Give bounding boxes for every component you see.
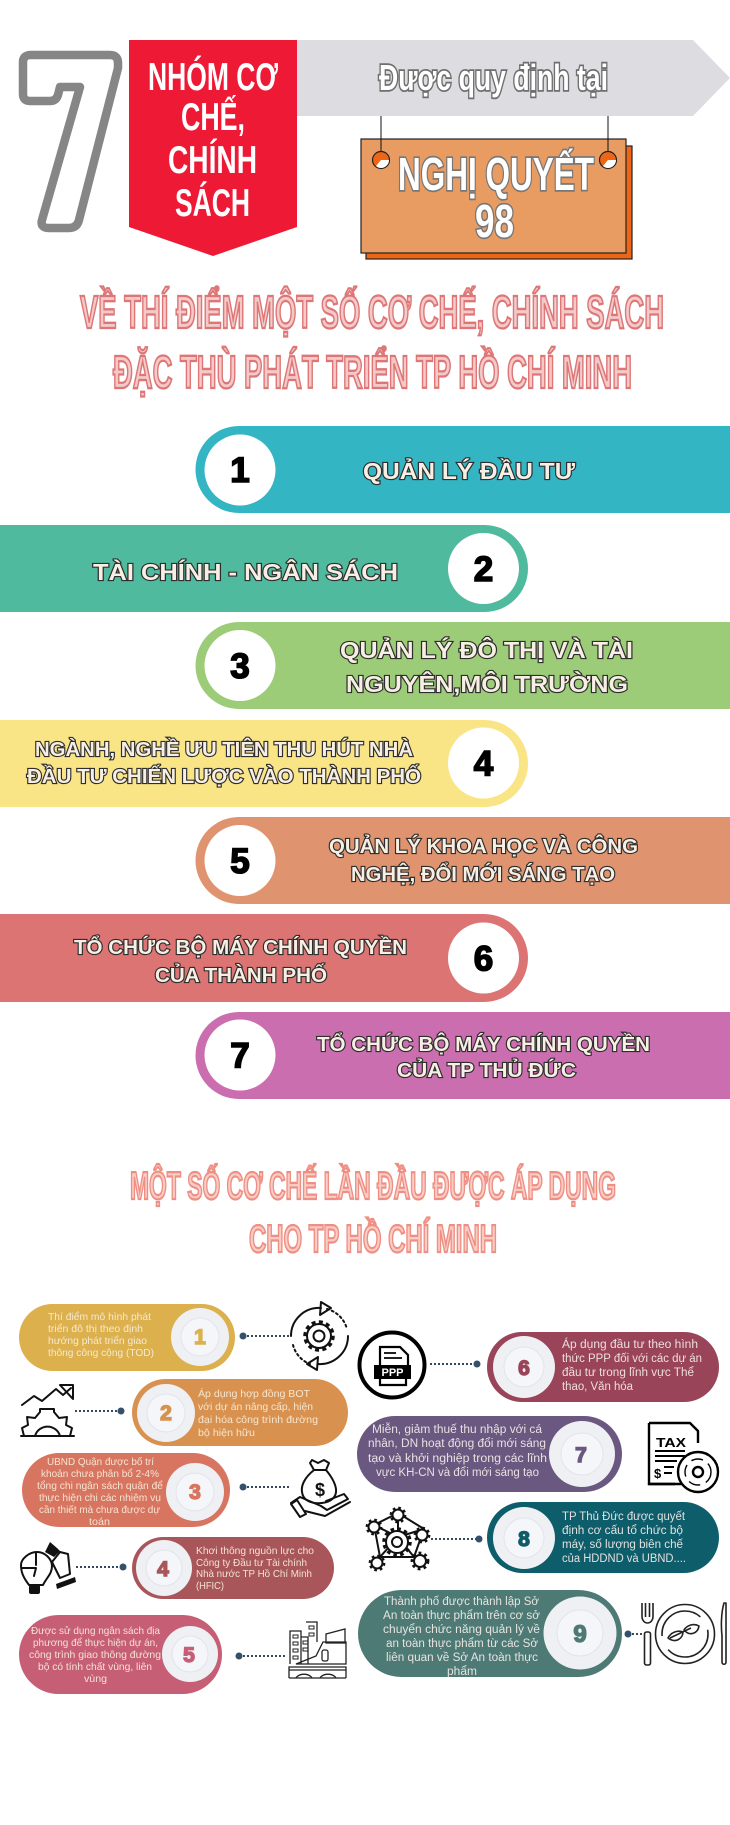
icon: PPP document: PPP [381, 1367, 404, 1379]
bar 2: tài chính - ngân sách [0, 525, 528, 612]
icon: money bag on hand: $ [315, 1480, 325, 1500]
item 1: TOD: hướng phát triển giao [48, 1335, 147, 1347]
item 9: Sở An toàn thực phẩm: An toàn thực phẩm trên cơ sở [383, 1610, 540, 1622]
item 5: ngân sách địa phương: 5 [183, 1644, 195, 1667]
red ribbon: Nhóm cơ chế, chính sách: SÁCH [175, 181, 250, 225]
bar 3: quản lý đô thị: NGUYÊN,MÔI TRƯỜNG [346, 670, 628, 697]
connector 6 [430, 1360, 480, 1368]
bar 6: bộ máy thành phố [0, 914, 528, 1002]
item 4: HFIC: Công ty Đầu tư Tài chính [196, 1557, 307, 1569]
item 9: Sở An toàn thực phẩm: an toàn thực phẩm từ các Sở [386, 1638, 538, 1650]
bar 4: ngành, nghề ưu tiên: 4 [474, 744, 494, 784]
icon: puzzle light bulb [21, 1542, 76, 1594]
item 8: TP Thủ Đức: định cơ cấu tổ chức bộ [562, 1525, 683, 1537]
connector 2 [75, 1408, 124, 1414]
item 3: UBND quận [22, 1453, 230, 1528]
bar 3: quản lý đô thị: QUẢN LÝ ĐÔ THỊ VÀ TÀI [340, 635, 633, 663]
bar 7: bộ máy TP Thủ Đức [196, 1012, 730, 1099]
item 7: miễn giảm thuế: Miễn, giảm thuế thu nhập với cá [372, 1423, 543, 1436]
bar 3: quản lý đô thị [196, 622, 730, 709]
item 4: HFIC: Nhà nước TP Hồ Chí Minh [196, 1568, 312, 1580]
item 2: BOT: đại hóa công trình đường [198, 1414, 318, 1426]
item 1: TOD: Thí điểm mô hình phát [48, 1311, 151, 1323]
bar 5: khoa học và công nghệ: NGHỆ, ĐỔI MỚI SÁNG TẠO [351, 862, 615, 886]
bar 6: bộ máy thành phố: TỔ CHỨC BỘ MÁY CHÍNH QUYỀN [74, 935, 407, 959]
connector 3 [240, 1484, 290, 1490]
icon: plate with fork and knife [642, 1603, 726, 1665]
item 3: UBND quận: khoản chưa phân bổ 2-4% [41, 1468, 159, 1480]
connector 5 [236, 1652, 286, 1660]
item 2: BOT: Áp dụng hợp đồng BOT [198, 1387, 311, 1400]
hanging sign: Nghị quyết 98: 98 [475, 195, 514, 247]
item 2: BOT: với dự án nâng cấp, hiện [198, 1401, 313, 1413]
bar 5: khoa học và công nghệ [196, 817, 730, 904]
item 9: Sở An toàn thực phẩm [358, 1590, 622, 1678]
icon: PPP document [360, 1332, 424, 1398]
main heading [80, 286, 664, 398]
item 4: HFIC [132, 1537, 334, 1599]
item 2: BOT: 2 [160, 1402, 172, 1425]
item 1: TOD [19, 1304, 235, 1371]
hanging sign: Nghị quyết 98: NGHỊ QUYẾT [398, 148, 594, 200]
second heading [130, 1163, 616, 1261]
item 3: UBND quận: cần thiết mà chưa được dự [39, 1504, 160, 1516]
bar 4: ngành, nghề ưu tiên [0, 720, 528, 807]
item 7: miễn giảm thuế: 7 [575, 1444, 587, 1467]
bar 2: tài chính - ngân sách: TÀI CHÍNH - NGÂN SÁCH [93, 558, 398, 585]
connector 4 [76, 1564, 126, 1570]
item 6: PPP: đầu tư trong lĩnh vực Thể [562, 1367, 694, 1379]
bar 6: bộ máy thành phố: CỦA THÀNH PHỐ [155, 963, 327, 987]
item 4: HFIC: (HFIC) [196, 1580, 224, 1592]
grey arrow banner: Được quy định tại [297, 40, 730, 116]
red ribbon: Nhóm cơ chế, chính sách [129, 40, 297, 256]
item 7: miễn giảm thuế: nhân, DN hoạt động đổi mới sáng [368, 1438, 546, 1450]
item 5: ngân sách địa phương: vùng [84, 1673, 107, 1685]
item 9: Sở An toàn thực phẩm: liên quan về Sở An toàn thực [386, 1652, 538, 1664]
item 3: UBND quận: tổng chi ngân sách quận để [37, 1480, 163, 1492]
item 3: UBND quận: 3 [189, 1481, 201, 1504]
icon: growth chart and gear [21, 1385, 74, 1436]
item 5: ngân sách địa phương: công trình giao thông đường [29, 1649, 161, 1661]
item 5: ngân sách địa phương [19, 1615, 222, 1694]
item 6: PPP: Áp dụng đầu tư theo hình [562, 1338, 698, 1351]
icon: gear cycle [291, 1302, 348, 1370]
bar 7: bộ máy TP Thủ Đức: TỔ CHỨC BỘ MÁY CHÍNH QUYỀN [317, 1032, 650, 1056]
item 7: miễn giảm thuế: vực KH-CN và đổi mới sáng tạo [376, 1467, 539, 1479]
connector 1 [240, 1332, 290, 1340]
item 3: UBND quận: toán [89, 1516, 110, 1528]
connector 8 [431, 1536, 482, 1542]
item 3: UBND quận: thực hiện chi các nhiệm vụ [39, 1492, 161, 1504]
bar 1: quản lý đầu tư: 1 [230, 451, 250, 490]
item 1: TOD: triển đô thị theo định [48, 1323, 143, 1335]
bar 6: bộ máy thành phố: 6 [474, 940, 493, 978]
red ribbon: Nhóm cơ chế, chính sách: CHẾ, [181, 95, 245, 139]
red ribbon: Nhóm cơ chế, chính sách: NHÓM CƠ [148, 55, 278, 99]
item 8: TP Thủ Đức: 8 [518, 1528, 530, 1551]
item 8: TP Thủ Đức: TP Thủ Đức được quyết [562, 1511, 686, 1523]
icon: gear network [367, 1508, 429, 1570]
bar 7: bộ máy TP Thủ Đức: CỦA TP THỦ ĐỨC [397, 1058, 576, 1082]
bar 4: ngành, nghề ưu tiên: ĐẦU TƯ CHIẾN LƯỢC VÀO THÀNH PHỐ [27, 764, 421, 788]
item 2: BOT: bộ hiện hữu [198, 1427, 255, 1439]
item 3: UBND quận: UBND Quận được bố trí [47, 1456, 154, 1468]
item 9: Sở An toàn thực phẩm: phẩm [447, 1666, 477, 1678]
bar 3: quản lý đô thị: 3 [230, 647, 250, 686]
item 7: miễn giảm thuế: tạo và khởi nghiệp trong các lĩnh [368, 1453, 547, 1465]
item 4: HFIC: Khơi thông nguồn lực cho [196, 1545, 314, 1557]
grey arrow banner: Được quy định tại: Được quy định tại [379, 57, 608, 98]
icon: tax document and coin [649, 1423, 718, 1492]
bar 5: khoa học và công nghệ: 5 [230, 842, 250, 881]
item 6: PPP [487, 1332, 719, 1402]
item 8: TP Thủ Đức: của HDDND và UBND.... [562, 1553, 686, 1565]
hanging sign: Nghị quyết 98 [361, 116, 632, 259]
second heading: CHO TP HỒ CHÍ MINH [249, 1217, 497, 1261]
red ribbon: Nhóm cơ chế, chính sách: CHÍNH [168, 138, 257, 182]
item 9: Sở An toàn thực phẩm: chuyển chức năng quản lý về [383, 1624, 540, 1636]
item 4: HFIC: 4 [157, 1558, 169, 1581]
item 2: BOT [132, 1379, 348, 1446]
item 1: TOD: 1 [194, 1326, 206, 1349]
bar 7: bộ máy TP Thủ Đức: 7 [230, 1036, 250, 1076]
bar 1: quản lý đầu tư [196, 426, 730, 513]
item 6: PPP: thức PPP đối với các dự án [562, 1353, 702, 1365]
item 8: TP Thủ Đức [487, 1502, 719, 1573]
icon: city road [289, 1622, 346, 1678]
item 6: PPP: 6 [518, 1357, 530, 1380]
bar 5: khoa học và công nghệ: QUẢN LÝ KHOA HỌC VÀ CÔNG [329, 834, 638, 858]
item 6: PPP: thao, Văn hóa [562, 1381, 634, 1393]
item 9: Sở An toàn thực phẩm: 9 [573, 1621, 587, 1648]
item 1: TOD: thông công cộng (TOD) [48, 1347, 154, 1359]
connector 9 [624, 1630, 643, 1638]
item 5: ngân sách địa phương: Được sử dụng ngân sách địa [31, 1625, 160, 1637]
icon: money bag on hand [291, 1460, 350, 1517]
icon: tax document and coin: $ [654, 1466, 662, 1481]
big numeral 7 [23, 55, 118, 228]
item 8: TP Thủ Đức: máy, số lượng biên chế [562, 1539, 684, 1551]
bar 1: quản lý đầu tư: QUẢN LÝ ĐẦU TƯ [363, 456, 576, 484]
bar 4: ngành, nghề ưu tiên: NGÀNH, NGHỀ ƯU TIÊN THU HÚT NHÀ [35, 737, 413, 761]
item 9: Sở An toàn thực phẩm: Thành phố được thành lập Sở [384, 1596, 539, 1608]
item 5: ngân sách địa phương: bộ có tính chất vùng, liên [38, 1661, 152, 1673]
item 7: miễn giảm thuế [357, 1416, 622, 1492]
icon: tax document and coin: TAX [656, 1435, 686, 1450]
item 5: ngân sách địa phương: phương để thực hiện dự án, [33, 1637, 158, 1649]
bar 2: tài chính - ngân sách: 2 [474, 550, 493, 589]
